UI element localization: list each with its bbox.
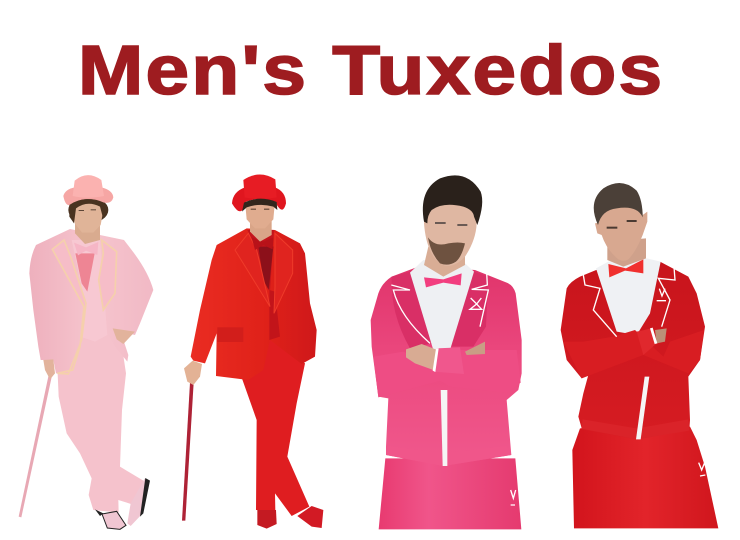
pants logo [511,490,516,505]
pink hands [43,328,135,379]
pocket flap [217,327,243,342]
pink jacket body [371,267,522,466]
figure: hot pink tracksuit man [371,175,522,529]
hair [242,199,277,212]
crossed arms [373,350,521,397]
zip line [441,390,447,466]
logo [657,289,666,301]
lapel line [583,267,675,337]
red jacket body [561,262,705,439]
pants logo [699,463,705,476]
hair fringe [69,199,107,223]
pink hat [63,175,113,205]
title: Men's Tuxedos [78,31,664,109]
figure: pink tuxedo with top hat and cane [19,175,153,529]
figure: red tuxedo with top hat and cane [182,174,323,529]
red shirt and tie [247,230,274,292]
neck [250,218,272,242]
dark hair [423,175,482,225]
waistband [386,446,511,466]
red bow tie [608,259,643,277]
ears and face [595,197,647,261]
white shirt panel [596,258,661,335]
waistband [581,419,689,439]
pink jacket [29,229,153,374]
crossed arms [563,330,704,378]
hair and neck [68,197,108,244]
red trousers [241,337,309,516]
logo [470,298,482,309]
upper lapels [392,272,488,348]
eyes [79,209,96,211]
pink trousers [57,333,143,513]
red hand [184,361,202,385]
figure: red tracksuit man [561,183,718,528]
eyes [435,222,467,226]
pink lapels [52,240,117,374]
red pants [572,427,718,528]
face [73,199,103,233]
neck [607,238,646,267]
eyes [607,220,637,229]
forearms [406,344,437,370]
face [245,201,275,228]
pink pants [379,458,521,529]
neck [424,247,465,277]
red lapels [235,233,293,313]
pink bow tie [74,242,98,255]
eyes [251,208,269,211]
face [424,198,477,266]
beard [428,237,465,265]
short hair [594,183,643,225]
zip line [636,377,649,439]
icon: pink cane [19,373,52,517]
red bow tie [252,237,273,250]
icon: red cane [182,383,194,521]
white shirt panel [410,260,474,350]
forearm [655,328,667,343]
red hat [232,174,286,211]
pink shoes [95,478,150,529]
pink vest and shirt [72,240,107,342]
red jacket [191,228,317,380]
red shoes [257,506,323,529]
lapel line [391,273,488,343]
pink bow tie [424,273,462,287]
